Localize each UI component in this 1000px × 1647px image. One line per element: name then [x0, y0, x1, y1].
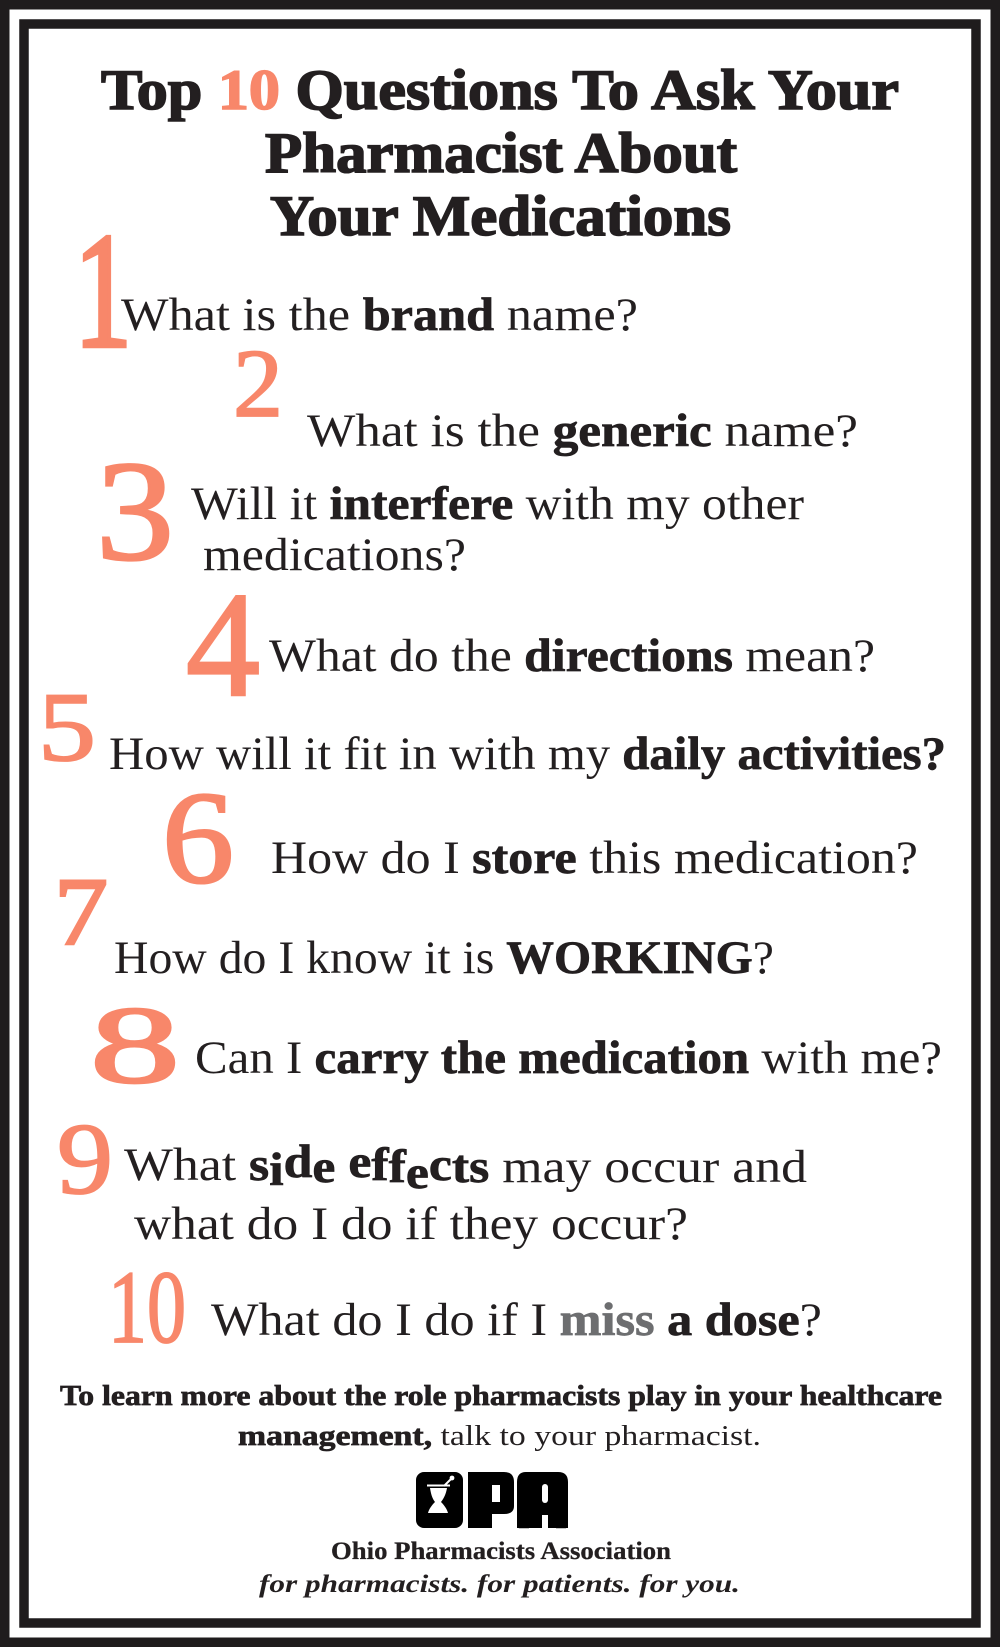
question 4: What do the directions mean? [269, 630, 875, 682]
question 3: Will it interfere with my other [191, 478, 804, 530]
question 9: may occur and [501, 1141, 778, 1193]
question 7: How do I know it is WORKING? [114, 932, 774, 984]
question 9 [124, 1136, 807, 1250]
question 6: How do I store this medication? [271, 832, 918, 884]
question 9: t [452, 1141, 469, 1193]
question 3: medications? [203, 529, 466, 581]
title: Top 10 Questions To Ask Your [101, 59, 899, 122]
logo letters: P [466, 1457, 514, 1545]
closing text: management, talk to your pharmacist. [238, 1420, 761, 1452]
question 9: f [389, 1141, 407, 1193]
association name: Ohio Pharmacists Association [331, 1538, 671, 1565]
question 9: what do I do if they occur? [134, 1198, 688, 1250]
number 9: 9 [57, 1103, 113, 1216]
number 10: 10 [108, 1250, 186, 1365]
number 3: 3 [96, 432, 174, 590]
logo letters: A [517, 1457, 568, 1545]
question 9: e [406, 1147, 429, 1199]
question 9: f [371, 1139, 390, 1191]
question 9: s [469, 1141, 489, 1193]
icon: mortar and pestle [416, 1472, 463, 1528]
number 4: 4 [186, 562, 260, 728]
title: Your Medications [270, 185, 731, 248]
logo letters [466, 1457, 568, 1545]
closing text: To learn more about the role pharmacists play in your healthcare [60, 1380, 942, 1412]
question 9: i [269, 1144, 284, 1196]
question 5: How will it fit in with my daily activities? [109, 728, 946, 780]
question 9: e [312, 1141, 335, 1193]
question 2: What is the generic name? [307, 405, 858, 457]
title: Pharmacist About [265, 122, 737, 185]
question 10: What do I do if I miss a dose? [211, 1294, 822, 1346]
question 8: Can I carry the medication with me? [195, 1032, 942, 1084]
question 9: d [284, 1136, 312, 1188]
question 9: c [429, 1139, 452, 1191]
closing text [60, 1380, 942, 1452]
title [101, 59, 899, 248]
number 8: 8 [90, 984, 180, 1106]
question 3 [191, 478, 804, 581]
number 7: 7 [54, 858, 108, 965]
number 1: 1 [74, 199, 132, 382]
question 9: e [348, 1136, 371, 1188]
number 5: 5 [38, 673, 96, 782]
tagline: for pharmacists. for patients. for you. [259, 1571, 740, 1598]
question 1: What is the brand name? [121, 289, 638, 341]
question 9: What s [124, 1139, 267, 1191]
number 2: 2 [233, 330, 283, 438]
number 6: 6 [162, 764, 234, 911]
logo: OPA [416, 1457, 568, 1545]
